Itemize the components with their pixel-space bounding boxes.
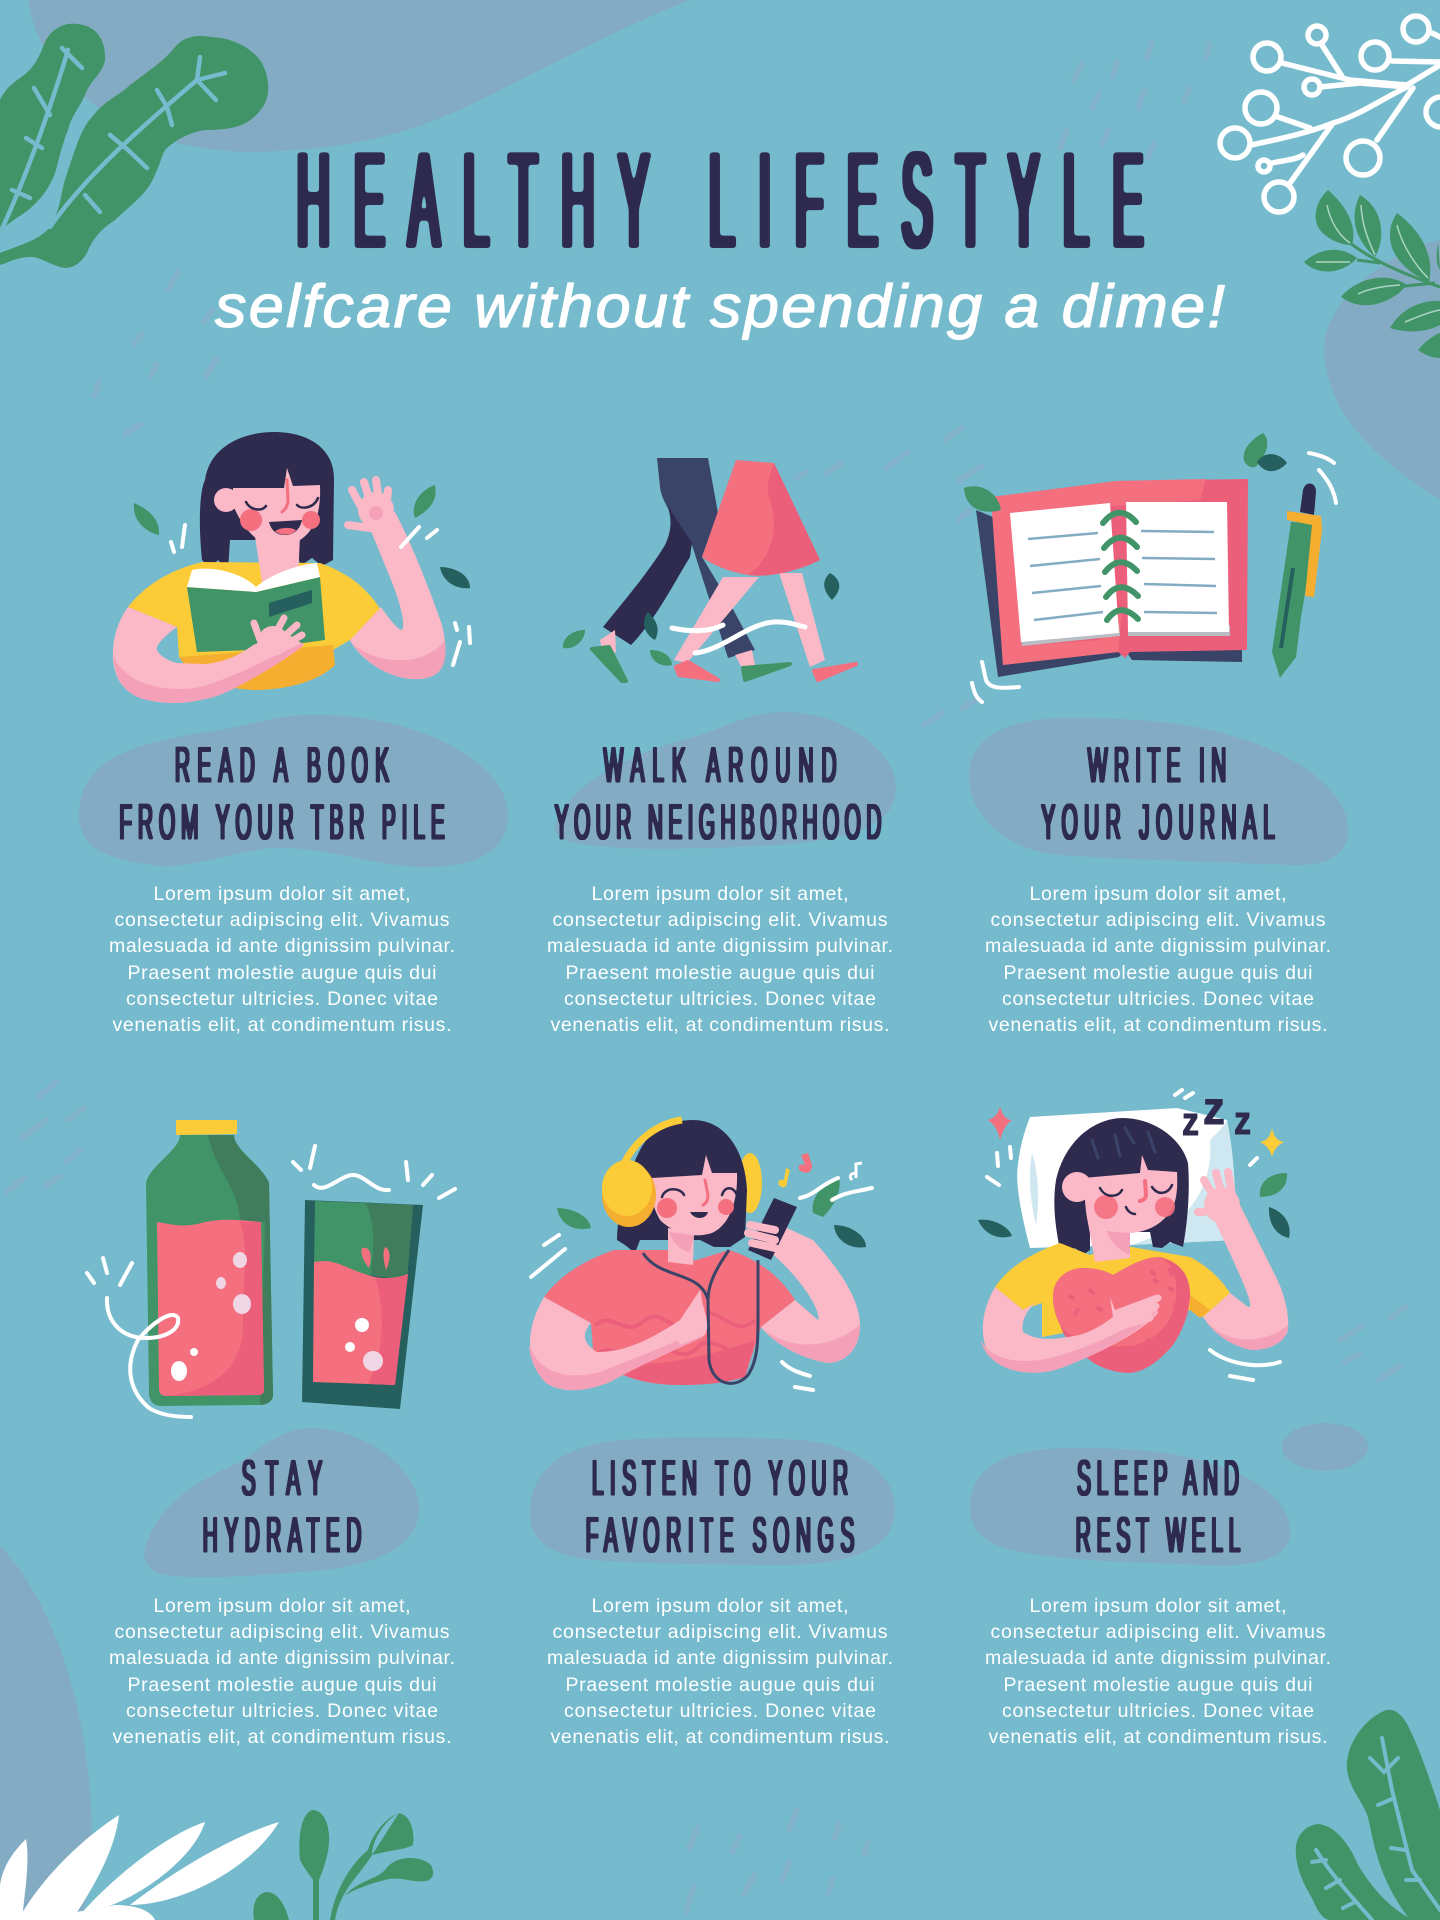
- description: Lorem ipsum dolor sit amet,: [154, 1595, 410, 1617]
- panel: sleep and rest: [970, 1082, 1331, 1748]
- description: Lorem ipsum dolor sit amet,: [1030, 1595, 1286, 1617]
- description: Praesent molestie augue quis dui: [566, 962, 874, 984]
- description: consectetur ultricies. Donec vitae: [126, 988, 438, 1010]
- description: consectetur adipiscing elit. Vivamus: [552, 909, 888, 931]
- description: Praesent molestie augue quis dui: [1004, 962, 1312, 984]
- description: consectetur adipiscing elit. Vivamus: [990, 909, 1326, 931]
- description: consectetur ultricies. Donec vitae: [1002, 988, 1314, 1010]
- description: venenatis elit, at condimentum risus.: [988, 1014, 1328, 1036]
- heading: FROM YOUR TBR PILE: [119, 795, 445, 851]
- description: [547, 883, 893, 1036]
- decoration: bottom green sprig: [253, 1810, 433, 1920]
- description: Praesent molestie augue quis dui: [566, 1674, 874, 1696]
- description: consectetur adipiscing elit. Vivamus: [552, 1621, 888, 1643]
- illustration: open journal and pen: [964, 433, 1336, 702]
- illustration: girl reading a book: [113, 432, 470, 703]
- description: venenatis elit, at condimentum risus.: [112, 1726, 452, 1748]
- heading: [119, 738, 445, 851]
- panel: read a book: [79, 432, 508, 1036]
- illustration: girl with headphones: [529, 1120, 872, 1390]
- description: venenatis elit, at condimentum risus.: [988, 1726, 1328, 1748]
- panel: listen to songs: [529, 1120, 895, 1748]
- background blob: small right: [1282, 1423, 1368, 1471]
- description: malesuada id ante dignissim pulvinar.: [985, 1647, 1331, 1669]
- description: malesuada id ante dignissim pulvinar.: [109, 1647, 455, 1669]
- heading blob: [144, 1428, 419, 1577]
- description: venenatis elit, at condimentum risus.: [550, 1014, 890, 1036]
- illustration: sleeping girl with heart pillow: [978, 1082, 1290, 1380]
- background blob: right: [1324, 240, 1440, 500]
- description: [985, 883, 1331, 1036]
- title: HEALTHY LIFESTYLE: [297, 124, 1143, 276]
- subtitle: selfcare without spending a dime!: [215, 273, 1225, 341]
- description: [547, 1595, 893, 1748]
- heading: STAY: [242, 1451, 322, 1507]
- illustration: sleeping girl with heart pillow: z: [1234, 1097, 1251, 1143]
- description: consectetur ultricies. Donec vitae: [564, 988, 876, 1010]
- illustration: sleeping girl with heart pillow: z: [1182, 1098, 1199, 1144]
- description: malesuada id ante dignissim pulvinar.: [547, 1647, 893, 1669]
- description: Praesent molestie augue quis dui: [128, 1674, 436, 1696]
- heading: SLEEP AND: [1077, 1451, 1239, 1507]
- heading blob: [555, 712, 896, 849]
- description: consectetur ultricies. Donec vitae: [126, 1700, 438, 1722]
- description: [109, 1595, 455, 1748]
- description: malesuada id ante dignissim pulvinar.: [985, 935, 1331, 957]
- heading blob: [970, 1448, 1290, 1566]
- decoration: bottom-left white leaves: [0, 1815, 279, 1920]
- decoration: bottom-right green leaves: [1296, 1710, 1440, 1920]
- heading: [203, 1451, 361, 1564]
- background blob: top: [28, 0, 690, 152]
- decoration: top-left green leaves: [0, 24, 268, 268]
- panel: write in journal: [964, 433, 1348, 1036]
- illustration: walking legs: [563, 458, 856, 681]
- heading: HYDRATED: [203, 1508, 361, 1564]
- description: malesuada id ante dignissim pulvinar.: [547, 935, 893, 957]
- background blob: bottom left: [0, 1545, 92, 1920]
- heading: REST WELL: [1076, 1508, 1240, 1564]
- heading: YOUR NEIGHBORHOOD: [555, 795, 881, 851]
- description: Praesent molestie augue quis dui: [128, 962, 436, 984]
- heading: [1076, 1451, 1240, 1564]
- decoration: top-right green sprig: [1304, 190, 1440, 358]
- description: [985, 1595, 1331, 1748]
- heading: FAVORITE SONGS: [586, 1508, 854, 1564]
- decoration: top-right white branch: [1220, 16, 1440, 212]
- description: Lorem ipsum dolor sit amet,: [592, 1595, 848, 1617]
- description: Lorem ipsum dolor sit amet,: [1030, 883, 1286, 905]
- heading: LISTEN TO YOUR: [592, 1451, 848, 1507]
- illustration: sleeping girl with heart pillow: z: [1203, 1082, 1225, 1134]
- heading blob: [79, 715, 508, 867]
- heading blob: [530, 1437, 895, 1565]
- description: venenatis elit, at condimentum risus.: [112, 1014, 452, 1036]
- heading: YOUR JOURNAL: [1041, 795, 1275, 851]
- panel: stay hydrated: [87, 1120, 455, 1748]
- description: consectetur adipiscing elit. Vivamus: [114, 1621, 450, 1643]
- panel: walk around: [547, 458, 896, 1036]
- description: venenatis elit, at condimentum risus.: [550, 1726, 890, 1748]
- heading: WALK AROUND: [603, 738, 837, 794]
- description: Praesent molestie augue quis dui: [1004, 1674, 1312, 1696]
- description: malesuada id ante dignissim pulvinar.: [109, 935, 455, 957]
- heading: WRITE IN: [1088, 738, 1226, 794]
- heading: [555, 738, 881, 851]
- description: Lorem ipsum dolor sit amet,: [154, 883, 410, 905]
- heading blob: [969, 718, 1348, 865]
- description: [109, 883, 455, 1036]
- description: consectetur adipiscing elit. Vivamus: [114, 909, 450, 931]
- heading: READ A BOOK: [175, 738, 389, 794]
- illustration: bottle and glass: [87, 1120, 455, 1417]
- description: consectetur ultricies. Donec vitae: [1002, 1700, 1314, 1722]
- heading: [586, 1451, 854, 1564]
- description: consectetur ultricies. Donec vitae: [564, 1700, 876, 1722]
- description: consectetur adipiscing elit. Vivamus: [990, 1621, 1326, 1643]
- heading: [1041, 738, 1275, 851]
- description: Lorem ipsum dolor sit amet,: [592, 883, 848, 905]
